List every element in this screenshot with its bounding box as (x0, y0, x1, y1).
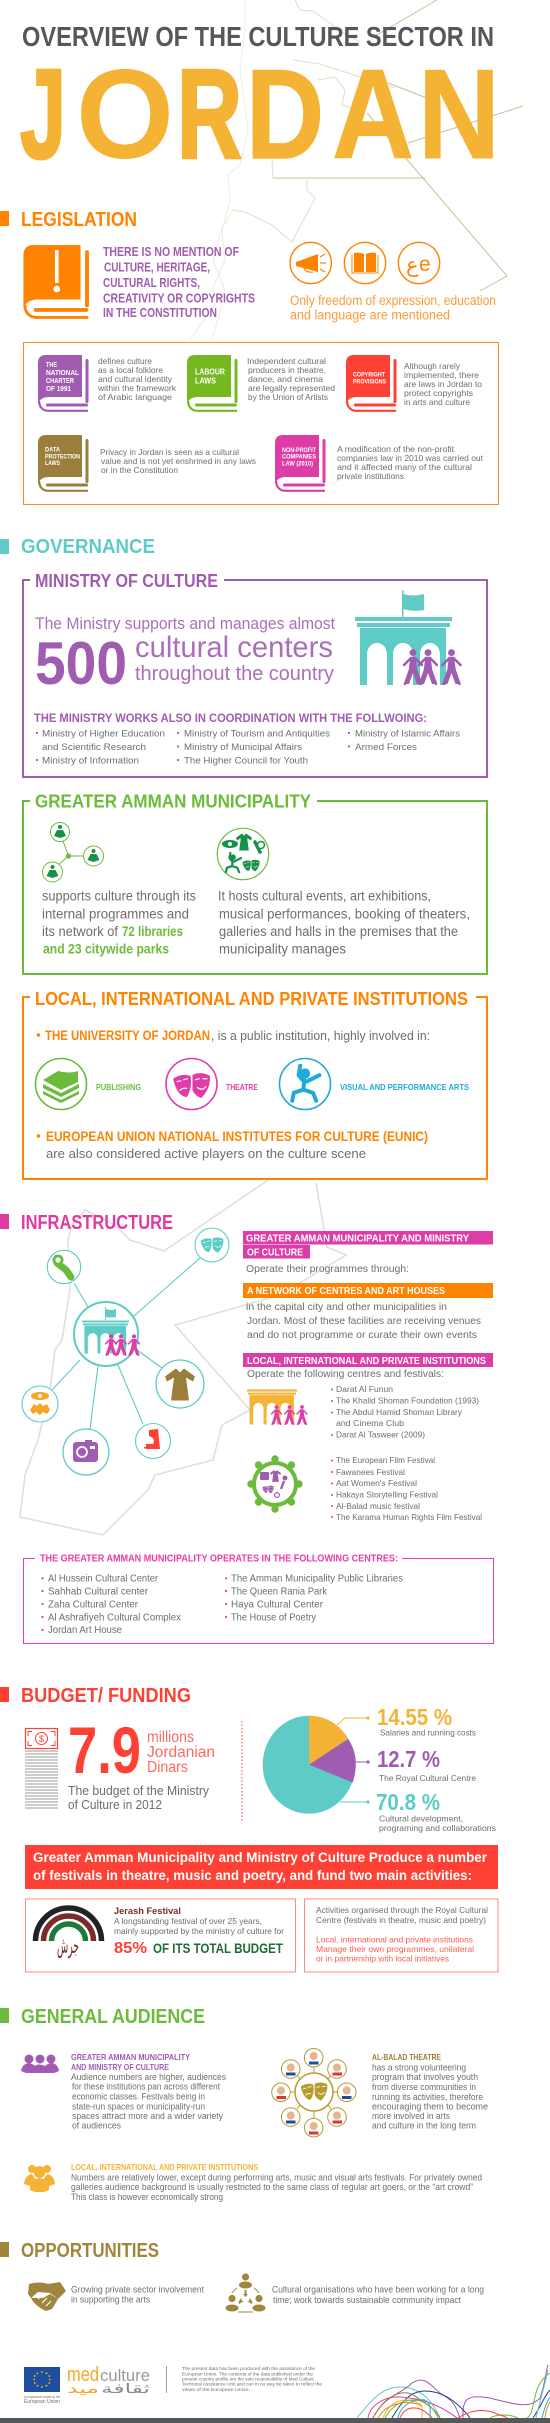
law: labour: by the Union of Artists (248, 392, 328, 402)
title: Jordan: R (177, 43, 242, 185)
heading: MINISTRY OF CULTURE (35, 570, 218, 591)
icon: language (398, 242, 440, 284)
list: column one: Zaha Cultural Center (48, 1600, 139, 1610)
law: labour: producers in theatre, (248, 365, 326, 375)
decoration: coloured threads (357, 2365, 550, 2418)
law: data protection: DATA (45, 447, 60, 454)
icon: jerash rainbow logo: جرش (57, 1934, 79, 1959)
list: centres: Darat Al Tasweer (2009) (336, 1430, 425, 1440)
text: al-balad theatre: more involved in arts (372, 2111, 450, 2121)
text: coordination list: Ministry of Tourism and Antiquities (184, 729, 330, 740)
text: gam and ministry audience: of audiences (72, 2121, 121, 2131)
text: eunic: EUROPEAN UNION NATIONAL INSTITUTES FOR CULTURE (EUNIC) (46, 1129, 428, 1144)
text: gam and ministry programmes (243, 1231, 493, 1275)
text: coordination list: Ministry of Islamic Affairs (355, 729, 460, 740)
text: network of centres (243, 1283, 493, 1341)
list: column two: The Amman Municipality Public Libraries (231, 1574, 403, 1585)
text: gam and ministry audience: Audience numbers are higher, audiences (71, 2072, 226, 2082)
list: column one: Al Hussein Cultural Center (48, 1574, 159, 1585)
text: network of centres: and do not programme or curate their own events (247, 1330, 477, 1341)
list: column one: Al Ashrafiyeh Cultural Complex (48, 1612, 181, 1623)
legend: cultural development: programing and collaborations (379, 1823, 496, 1833)
law: data protection: value and is not yet enshrined in any laws (101, 456, 256, 466)
text: gam and ministry audience: GREATER AMMAN MUNICIPALITY (71, 2052, 190, 2062)
title: Jordan (20, 43, 500, 185)
satellite: eye and sound (22, 1386, 58, 1422)
icon: purple audience (21, 2054, 59, 2073)
legend: royal cultural centre: 12.7 % (377, 1746, 440, 1772)
law: data protection (38, 435, 256, 491)
text: local institutions: LOCAL, INTERNATIONAL AND PRIVATE INSTITUTIONS (247, 1355, 486, 1367)
logo: med culture: med (67, 2364, 99, 2386)
icon: publishing: PUBLISHING (96, 1083, 141, 1092)
text: cultural organisations: time; work towards sustainable community impact (273, 2295, 461, 2305)
text: al-balad theatre: and culture in the long term (372, 2121, 476, 2131)
text: local institutions audience: galleries audience background is usually restricted to the same class of regular art goers, or the “art crowd” (71, 2182, 473, 2192)
text: gam and ministry audience: for these institutions pan across different (72, 2082, 220, 2092)
text: supports culture (42, 889, 196, 956)
icon: cultural events circle (217, 828, 269, 880)
logo: european union: A programme funded by the (24, 2395, 60, 2399)
figure: 7.9 millions jordanian dinars: millions (147, 1729, 194, 1746)
text: network of centres: Jordan. Most of these facilities are receiving venues (247, 1316, 481, 1327)
text: supports culture: and 23 citywide parks (43, 942, 169, 956)
text: cultural organisations (272, 2285, 484, 2305)
icon: megaphone (290, 242, 331, 284)
text: freedoms mentioned (290, 293, 496, 322)
legend: salaries: 14.55 % (377, 1704, 452, 1730)
title: Jordan: A (332, 43, 414, 185)
text: no mention in the constitution: IN THE CONSTITUTION (103, 305, 217, 320)
hub: cultural building (74, 1302, 139, 1366)
text: 500 cultural centers: The Ministry supports and manages almost (35, 615, 335, 633)
text: al-balad theatre: encouraging them to become (372, 2102, 488, 2112)
banner: festivals and funded activities (25, 1845, 498, 1889)
law: national charter: as a local folklore (98, 365, 163, 375)
law: national charter: NATIONAL (46, 370, 80, 377)
logo: european union (24, 2367, 60, 2405)
text: coordination list: Armed Forces (355, 742, 417, 753)
text: gam and ministry audience: state-run spaces or municipality-run (72, 2101, 205, 2111)
law: copyright (346, 355, 482, 411)
law: data protection: LAWS (45, 460, 61, 467)
text: eu disclaimer: present country profile are the sole responsibility of Med Culture (182, 2376, 315, 2381)
list: centres: Darat Al Funun (336, 1384, 393, 1394)
list: festivals: Fawanees Festival (336, 1467, 405, 1477)
text: no mention in the constitution: CREATIVITY OR COPYRIGHTS (103, 290, 255, 306)
heading: THE GREATER AMMAN MUNICIPALITY OPERATES IN THE FOLLOWING CENTRES: (40, 1552, 398, 1564)
panel: greater amman municipality (23, 790, 487, 974)
legend: royal cultural centre (377, 1746, 476, 1783)
law: labour: LABOUR (195, 367, 225, 377)
law: copyright: are laws in Jordan to (404, 379, 482, 389)
text: gam and ministry audience: AND MINISTRY OF CULTURE (71, 2062, 169, 2072)
law: non-profit companies: A modification of the non-profit (337, 444, 455, 454)
text: eunic (37, 1129, 428, 1161)
list: column one: Jordan Art House (48, 1625, 122, 1636)
panel: local, international and private institutions (23, 985, 487, 1179)
text: al-balad theatre: AL-BALAD THEATRE (372, 2052, 441, 2062)
icon: theatre (166, 1058, 259, 1110)
law: national charter: defines culture (98, 356, 152, 366)
list: festivals (331, 1455, 482, 1522)
list: column two: The House of Poetry (231, 1612, 316, 1623)
legend: salaries: Salaries and running costs (380, 1728, 476, 1738)
text: no mention in the constitution: CULTURAL RIGHTS, (103, 275, 200, 290)
text: private sector involvement: in supporting the arts (71, 2295, 150, 2305)
panel: jerash festival (26, 1899, 296, 1972)
icon: language: ع (406, 253, 419, 277)
text: supports culture: supports culture through its (42, 889, 196, 904)
diagram: infrastructure hub (22, 1228, 229, 1475)
icon: jerash rainbow logo (36, 1908, 102, 1959)
text: private sector involvement (71, 2285, 204, 2305)
text: eu disclaimer (182, 2366, 323, 2392)
list: centres: The Khalid Shoman Foundation (1993) (336, 1396, 479, 1406)
list: festivals: The European Film Festival (336, 1455, 435, 1465)
text: supports culture: its network of (42, 924, 118, 939)
title: Jordan: O (76, 43, 174, 185)
text: university of jordan: THE UNIVERSITY OF JORDAN (45, 1028, 210, 1043)
law: copyright: protect copyrights (404, 388, 473, 398)
legend: salaries (377, 1704, 476, 1738)
law: non-profit companies: private institutions (337, 471, 404, 481)
figure: 7.9 millions jordanian dinars (68, 1713, 215, 1812)
text: network of centres: in the capital city and other municipalities in (246, 1302, 447, 1313)
icon: yellow building with people (247, 1389, 307, 1425)
text: hosts cultural events: musical performances, booking of theaters, (219, 906, 470, 921)
figure: 7.9 millions jordanian dinars: Dinars (147, 1759, 188, 1776)
law: copyright: Although rarely (404, 361, 461, 371)
heading: GREATER AMMAN MUNICIPALITY (35, 790, 312, 812)
text: al-balad theatre: program that involves youth (372, 2072, 478, 2082)
satellite: spyglass (47, 1250, 81, 1284)
text: jerash description (114, 1906, 284, 1957)
text: no mention in the constitution: CULTURE, HERITAGE, (104, 260, 210, 274)
panel: royal cultural centre activities: Manage their own programmes, unilateral (316, 1944, 474, 1954)
text: freedoms mentioned: Only freedom of expression, education (290, 293, 496, 308)
list: festivals: Aat Women's Festival (336, 1478, 417, 1488)
text: private sector involvement: Growing private sector involvement (71, 2285, 204, 2295)
law: data protection: Privacy in Jordan is seen as a cultural (100, 447, 239, 457)
text: hosts cultural events (218, 889, 470, 956)
text: gam and ministry audience (71, 2052, 226, 2131)
satellite: robe (156, 1360, 204, 1408)
figure: 7.9 millions jordanian dinars: Jordanian (147, 1744, 215, 1761)
text: jerash description: OF ITS TOTAL BUDGET (153, 1940, 283, 1956)
heading: governance: GOVERNANCE (21, 536, 155, 558)
law: non-profit companies: and it affected many of the cultural (337, 462, 472, 472)
chart: budget pie (263, 1716, 370, 1814)
law: data protection: or in the Constitution (101, 465, 178, 475)
logo: med culture: culture (100, 2366, 150, 2385)
text: al-balad theatre: has a strong volunteering (372, 2062, 466, 2072)
icon: community circle (226, 2273, 266, 2312)
text: 500 cultural centers (35, 615, 335, 697)
footer bar (0, 2418, 550, 2423)
list: column one (41, 1574, 181, 1636)
law: copyright: PROVISIONS (353, 380, 386, 386)
heading: infrastructure: INFRASTRUCTURE (21, 1212, 173, 1234)
law: national charter: and cultural identity (98, 374, 173, 384)
satellite: masks (195, 1228, 229, 1262)
text: 500 cultural centers: 500 (35, 630, 127, 697)
icon: theatre: THEATRE (226, 1083, 259, 1092)
text: local institutions audience: Numbers are relatively lower, except during performing arts, music and visual arts festivals. For privately owned (71, 2172, 482, 2182)
text: al-balad theatre: from diverse communities in (372, 2082, 476, 2092)
text: local institutions (243, 1353, 493, 1380)
title: Jordan: D (246, 43, 324, 185)
law: national charter (38, 355, 177, 411)
law: labour (187, 355, 335, 411)
text: al-balad theatre: running its activities, therefore (372, 2092, 483, 2102)
text: coordination list (34, 711, 460, 766)
background map: infrastructure (20, 1180, 346, 1535)
list: centres: and Cinema Club (336, 1418, 404, 1428)
text: hosts cultural events: municipality manages (219, 942, 346, 956)
icon: publishing (36, 1058, 141, 1110)
text: university of jordan (37, 1028, 430, 1043)
text: eu disclaimer: The present data has been produced with the assistance of the (182, 2366, 316, 2371)
text: freedoms mentioned: and language are mentioned (290, 308, 450, 322)
legend: cultural development: Cultural development, (379, 1814, 463, 1824)
text: eu disclaimer: Technical Assistance Unit and can in no way be taken to reflect the (182, 2382, 323, 2387)
icon: theatre ring with volunteers (272, 2048, 356, 2137)
text: local institutions audience (71, 2162, 482, 2202)
law: copyright: COPYRIGHT (353, 373, 385, 379)
text: gam and ministry programmes: Operate their programmes through: (246, 1264, 409, 1275)
text: coordination list: and Scientific Research (42, 742, 146, 753)
figure: 7.9 millions jordanian dinars: 7.9 (68, 1713, 141, 1787)
list: centres (331, 1384, 479, 1440)
law: non-profit companies: LAW (2010) (282, 460, 313, 467)
law: labour: LAWS (195, 376, 216, 386)
list: festivals: Al-Balad music festival (336, 1501, 420, 1511)
text: jerash description: Jerash Festival (114, 1906, 181, 1917)
law: labour: dance, and cinema (248, 374, 323, 384)
list: festivals: Hakaya Storytelling Festival (336, 1490, 438, 1500)
satellite: gramophone (136, 1424, 170, 1458)
law: labour: Independent cultural (247, 356, 326, 366)
icon: library network (42, 822, 104, 882)
law: national charter: within the framework (97, 383, 177, 393)
icon: orange book with exclamation mark (23, 245, 89, 317)
logo: med culture: ميد (67, 2382, 99, 2397)
icon: visual and performance arts (280, 1058, 470, 1110)
list: column two: The Queen Rania Park (231, 1586, 328, 1598)
text: coordination list: The Higher Council for Youth (184, 756, 308, 766)
text: supports culture: internal programmes and (42, 906, 189, 921)
text: 500 cultural centers: cultural centers (135, 631, 333, 664)
legend: royal cultural centre: The Royal Cultural Centre (379, 1773, 476, 1783)
heading: LOCAL, INTERNATIONAL AND PRIVATE INSTITUTIONS (35, 989, 468, 1009)
law: national charter: OF 1991 (46, 386, 71, 393)
text: coordination list: THE MINISTRY WORKS ALSO IN COORDINATION WITH THE FOLLWOING: (34, 711, 427, 725)
legend: cultural development: 70.8 % (376, 1789, 440, 1815)
panel: ministry of culture (23, 570, 487, 777)
panel: royal cultural centre activities: Centre (festivals in theatre, music and poetry) (316, 1915, 486, 1925)
logo: med culture (67, 2364, 151, 2397)
list: centres: The Abdul Hamid Shoman Library (336, 1407, 463, 1417)
text: supports culture: 72 libraries (122, 924, 183, 939)
banner: festivals and funded activities: of festivals in theatre, music and poetry, and fund two main activities: (33, 1867, 472, 1883)
icon: festivals circle (247, 1455, 303, 1513)
law: labour: are legally represented (248, 383, 335, 393)
text: jerash description: 85% (114, 1940, 147, 1957)
icon: visual and performance arts: VISUAL AND PERFORMANCE ARTS (340, 1083, 470, 1092)
law: non-profit companies (275, 435, 484, 491)
panel: royal cultural centre activities: Local, international and private institutions (316, 1934, 473, 1944)
text: coordination list: Ministry of Information (42, 756, 139, 766)
panel: gam centres (24, 1552, 494, 1644)
icon: language: e (419, 253, 431, 276)
satellite: camera (63, 1429, 109, 1475)
text: local institutions audience: This class is however economically strong (71, 2192, 223, 2202)
text: hosts cultural events: galleries and halls in the premises that the (219, 924, 458, 939)
text: al-balad theatre (372, 2052, 488, 2131)
icon: open book (344, 242, 386, 284)
text: hosts cultural events: It hosts cultural events, art exhibitions, (218, 889, 431, 904)
law: national charter: THE (46, 362, 57, 369)
law: national charter: of Arabic language (98, 392, 172, 402)
text: eunic: are also considered active players on the culture scene (46, 1146, 366, 1161)
text: no mention in the constitution: THERE IS NO MENTION OF (103, 244, 239, 259)
list: column two (225, 1574, 403, 1623)
heading: general audience: GENERAL AUDIENCE (21, 2006, 205, 2028)
text: no mention in the constitution (103, 244, 255, 320)
panel: royal cultural centre activities: Activities organised through the Royal Cultural (316, 1905, 488, 1915)
list: column two: Haya Cultural Center (231, 1600, 324, 1610)
figure: 7.9 millions jordanian dinars: of Culture in 2012 (68, 1797, 162, 1812)
figure: 7.9 millions jordanian dinars: The budget of the Ministry (68, 1783, 209, 1798)
title: Jordan: J (20, 43, 66, 185)
text: gam and ministry audience: spaces attract more and a wider variety (72, 2111, 223, 2121)
legend: cultural development (376, 1789, 496, 1833)
text: university of jordan: , is a public institution, highly involved in: (211, 1028, 430, 1043)
title: Jordan: N (418, 43, 500, 185)
panel: laws (24, 342, 498, 504)
law: non-profit companies: COMPANIES (282, 454, 317, 461)
text: gam and ministry programmes: OF CULTURE (247, 1246, 303, 1258)
law: data protection: PROTECTION (45, 453, 80, 460)
list: festivals: The Karama Human Rights Film Festival (336, 1512, 482, 1522)
heading: budget and funding: BUDGET/ FUNDING (21, 1685, 191, 1707)
text: 500 cultural centers: throughout the country (135, 663, 334, 685)
law: non-profit companies: companies law in 2010 was carried out (337, 453, 484, 463)
heading: opportunities: OPPORTUNITIES (21, 2240, 159, 2262)
text: jerash description: mainly supported by the ministry of culture for (114, 1926, 284, 1936)
text: cultural organisations: Cultural organisations who have been working for a long (272, 2285, 484, 2295)
text: coordination list: Ministry of Municipal Affairs (184, 742, 302, 753)
text: local institutions: Operate the following centres and festivals: (247, 1369, 444, 1380)
text: network of centres: A NETWORK OF CENTRES AND ART HOUSES (247, 1285, 445, 1297)
icon: yellow audience (24, 2165, 55, 2192)
background map: top (190, 0, 523, 340)
text: local institutions audience: LOCAL, INTERNATIONAL AND PRIVATE INSTITUTIONS (71, 2162, 258, 2172)
text: gam and ministry audience: economic classes. Festivals being in (72, 2091, 205, 2101)
icon: handshake (28, 2282, 66, 2311)
banner: festivals and funded activities: Greater Amman Municipality and Ministry of Culture Produce a number (33, 1849, 488, 1865)
text: eu disclaimer: European Union. The contents of the data published under the (182, 2371, 314, 2376)
text: eu disclaimer: views of the European Union. (182, 2387, 250, 2392)
text: jerash description: A longstanding festival of over 25 years, (114, 1916, 262, 1926)
list: column one: Sahhab Cultural center (48, 1586, 149, 1598)
logo: med culture: ثقافة (101, 2382, 151, 2397)
icon: banknote stack: $ (39, 1734, 44, 1744)
law: national charter: CHARTER (46, 378, 74, 385)
heading: legislation: LEGISLATION (21, 209, 137, 231)
icon: banknote stack (25, 1728, 58, 1808)
law: non-profit companies: NON-PROFIT (282, 447, 316, 454)
logo: european union: European Union (24, 2399, 60, 2405)
text: gam and ministry programmes: GREATER AMMAN MUNICIPALITY AND MINISTRY (246, 1233, 469, 1245)
icon: cultural building with people (355, 590, 460, 685)
law: copyright: in arts and culture (404, 397, 470, 407)
panel: royal cultural centre activities (304, 1899, 498, 1972)
panel: royal cultural centre activities: or in partnership with local initiatives (316, 1954, 449, 1964)
law: copyright: implemented, there (404, 370, 479, 380)
text: coordination list: Ministry of Higher Education (42, 729, 165, 740)
